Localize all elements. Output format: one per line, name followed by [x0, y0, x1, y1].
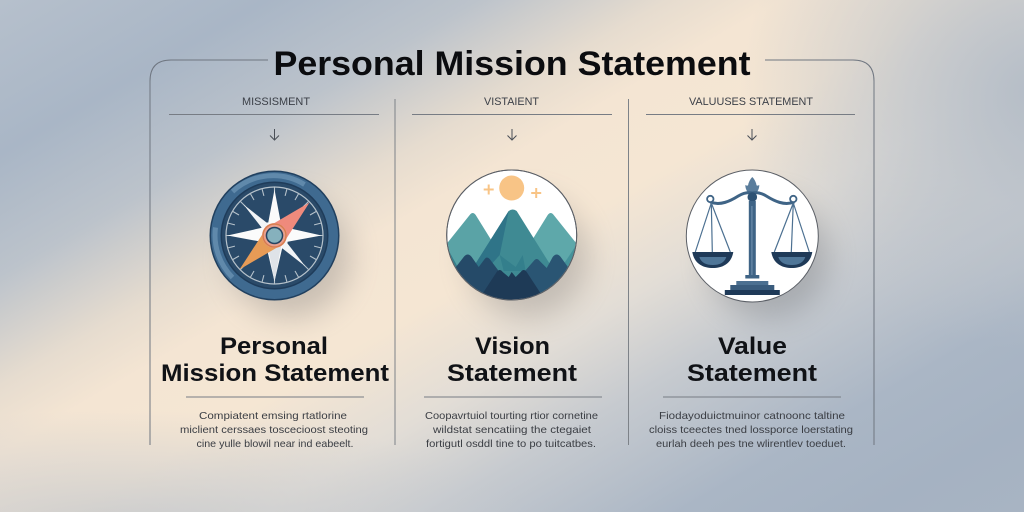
- icon: scales: [686, 170, 828, 318]
- values label: VALUUSES STATEMENT: [689, 96, 813, 108]
- body text: Compiatent emsing rtatlorine: [199, 410, 347, 422]
- heading: vision statement: Vision: [475, 333, 550, 360]
- vision label rule: [412, 114, 612, 116]
- mission label rule: [169, 114, 379, 116]
- panel: vision: [412, 96, 612, 450]
- values label rule: [646, 114, 855, 116]
- body text: cloiss tceectes tned lossporce loerstating: [649, 424, 853, 436]
- arrow: mission: [270, 129, 279, 140]
- mission label: MISSISMENT: [242, 96, 310, 108]
- heading rule: [424, 396, 602, 398]
- heading: personal mission statement: Personal: [220, 333, 328, 360]
- panel: mission: [161, 96, 389, 450]
- heading: value statement: Value: [718, 333, 787, 360]
- body text: fortigutl osddl tine to po tuitcatbes.: [426, 438, 596, 450]
- title: Personal Mission Statement: [274, 45, 751, 83]
- body text: eurlah deeh pes tne wlirentlev toeduet.: [656, 438, 846, 450]
- icon: compass: [210, 170, 350, 318]
- heading: personal mission statement: Mission Statement: [161, 360, 389, 387]
- heading: value statement: Statement: [687, 360, 817, 387]
- body text: [180, 410, 368, 450]
- heading: value statement: [687, 333, 817, 387]
- vision label: VISTAIENT: [484, 96, 539, 108]
- arrow: values: [748, 129, 756, 140]
- body text: [425, 410, 598, 450]
- column divider right: [628, 99, 630, 445]
- body text: cine yulle blowil near ind eabeelt.: [196, 438, 354, 450]
- body text: Fiodayoduictmuinor catnoonc taltine: [659, 410, 845, 422]
- icon: mountains: [442, 170, 588, 317]
- heading: vision statement: [447, 333, 577, 387]
- body text: miclient cerssaes toscecioost steoting: [180, 424, 368, 436]
- heading: vision statement: Statement: [447, 360, 577, 387]
- body text: [649, 410, 853, 450]
- body text: wildstat sencatiing the ctegaiet: [432, 424, 591, 436]
- heading rule: [663, 396, 841, 398]
- heading rule: [186, 396, 364, 398]
- heading: personal mission statement: [161, 333, 389, 387]
- column divider left: [394, 99, 396, 445]
- arrow: vision: [508, 129, 516, 140]
- outer frame: [150, 60, 874, 445]
- panel: values: [646, 96, 855, 450]
- body text: Coopavrtuiol tourting rtior cornetine: [425, 410, 598, 422]
